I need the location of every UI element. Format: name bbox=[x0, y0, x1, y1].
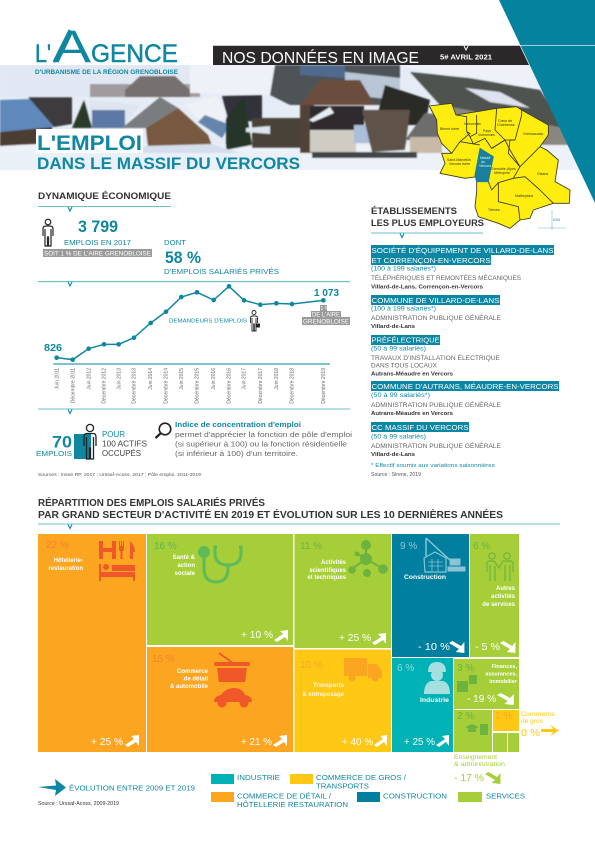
treemap: finances bbox=[454, 659, 519, 709]
treemap: finances: immobilier bbox=[489, 679, 518, 685]
divider bbox=[38, 409, 350, 414]
treemap: industrie: 6 % bbox=[397, 663, 414, 674]
heading: établissements: LES PLUS EMPLOYEURS bbox=[371, 218, 484, 229]
map labels: Oisans bbox=[537, 172, 548, 176]
legend: sectors: TRANSPORTS bbox=[316, 782, 369, 790]
heading: répartition des emplois: RÉPARTITION DES EMPLOIS SALARIÉS PRIVÉS bbox=[38, 496, 265, 509]
treemap: santé: action bbox=[177, 563, 195, 569]
treemap: santé: + 10 % bbox=[241, 629, 273, 641]
legend: evolution arrow: ÉVOLUTION ENTRE 2009 ET 2019 bbox=[69, 784, 195, 793]
legend: sectors bbox=[211, 773, 525, 809]
map labels: Trièves bbox=[488, 208, 500, 212]
employer 5: (50 à 99 salariés) bbox=[371, 434, 426, 440]
icon: people bbox=[487, 553, 513, 581]
employer 5: ADMINISTRATION PUBLIQUE GÉNÉRALE bbox=[371, 443, 501, 450]
arrow: up bbox=[274, 630, 288, 642]
map north scale: IGN bbox=[553, 217, 560, 222]
title: DANS LE MASSIF DU VERCORS bbox=[37, 154, 300, 173]
employer 4: (50 à 99 salariés*) bbox=[371, 393, 430, 399]
note: indice de concentration: (si supérieur à 100) ou la fonction résidentielle bbox=[175, 442, 347, 448]
callout: enseignement: - 17 % bbox=[454, 772, 484, 784]
line chart: demandeurs d'emploi bbox=[44, 284, 350, 404]
employer 4: COMMUNE D'AUTRANS, MÉAUDRE-EN-VERCORS bbox=[372, 382, 559, 391]
treemap: hôtellerie-restauration: Hôtellerie- bbox=[54, 558, 83, 564]
treemap: commerce de détail: & automobile bbox=[170, 684, 209, 690]
stat: 58 % bbox=[164, 238, 279, 276]
treemap: construction: - 10 % bbox=[418, 641, 450, 653]
map labels: Grenoble-Alpes bbox=[491, 167, 516, 171]
note: indice de concentration: (si inférieur à 100) d'un territoire. bbox=[175, 451, 298, 458]
employer 3: (50 à 99 salariés) bbox=[371, 346, 426, 352]
icon: stethoscope bbox=[200, 547, 241, 582]
arrow: up bbox=[436, 735, 449, 747]
line chart: demandeurs d'emploi: Juin 2013 bbox=[116, 368, 122, 390]
map north scale bbox=[538, 210, 566, 230]
line chart: demandeurs d'emploi: Décembre 2019 bbox=[321, 368, 327, 404]
treemap: santé bbox=[147, 534, 293, 645]
treemap: activités scientifiques bbox=[294, 534, 391, 648]
title bbox=[36, 129, 300, 173]
treemap: enseignement: 2 % bbox=[457, 711, 474, 722]
employer 3: Autrans-Méaudre en Vercors bbox=[371, 372, 453, 378]
treemap: construction: 9 % bbox=[400, 541, 417, 552]
line chart: demandeurs d'emploi: Juin 2012 bbox=[86, 368, 92, 390]
treemap: autres services: 6 % bbox=[473, 541, 490, 552]
icon: magnifier bbox=[156, 423, 171, 438]
line chart: demandeurs d'emploi: Juin 2016 bbox=[211, 368, 217, 390]
treemap: autres services: - 5 % bbox=[475, 641, 500, 653]
treemap: commerce de détail: 15 % bbox=[152, 654, 175, 665]
icon: crane bbox=[424, 538, 465, 572]
map labels: Chartreuse bbox=[497, 123, 515, 127]
header band: nos données en image: 5# AVRIL 2021 bbox=[440, 52, 492, 62]
employer 3: DANS TOUS LOCAUX bbox=[371, 364, 437, 370]
footnote and source: Source : Sirene, 2019 bbox=[371, 472, 421, 478]
stat: 58 %: DONT bbox=[164, 238, 186, 247]
treemap: activités scientifiques: + 25 % bbox=[339, 632, 371, 644]
treemap: commerce de détail: de détail bbox=[184, 676, 208, 682]
callout: commerce de gros: Commerce bbox=[521, 712, 556, 718]
line chart: demandeurs d'emploi: Décembre 2016 bbox=[226, 368, 232, 404]
icon: person bbox=[43, 219, 53, 246]
callout: commerce de gros: de gros bbox=[521, 719, 543, 725]
teal corner triangle bbox=[499, 0, 595, 203]
employer 1 bbox=[371, 245, 554, 290]
legend: sectors: INDUSTRIE bbox=[237, 773, 280, 782]
arrow: down bbox=[497, 693, 514, 705]
treemap: autres services bbox=[470, 534, 519, 657]
callout: commerce de gros bbox=[521, 712, 559, 739]
treemap: construction: Construction bbox=[404, 575, 446, 581]
map labels: Métropole bbox=[494, 171, 510, 175]
map labels: Pays bbox=[483, 129, 491, 133]
stat: 3 799 emplois: SOIT 1 % DE L'AIRE GRENOBLOISE bbox=[44, 250, 152, 258]
stat: 70 emplois pour 100 actifs occupés: 70 bbox=[52, 432, 72, 452]
line chart: demandeurs d'emploi: 826 bbox=[44, 342, 62, 354]
note: indice de concentration bbox=[175, 422, 353, 458]
icon: job seeker with briefcase bbox=[250, 310, 260, 331]
arrow: down bbox=[485, 772, 500, 784]
map of territories bbox=[429, 103, 570, 228]
map labels: Bièvre Isère bbox=[440, 127, 459, 131]
treemap: enseignement bbox=[454, 710, 492, 752]
callout: enseignement: Enseignement bbox=[454, 755, 497, 761]
callout: commerce de gros: 0 % bbox=[521, 727, 540, 739]
treemap: autres services: Autres bbox=[496, 586, 516, 592]
title: L'EMPLOI bbox=[37, 132, 142, 155]
map labels: Matheysine bbox=[515, 194, 533, 198]
treemap: activités scientifiques: et techniques bbox=[307, 575, 347, 581]
treemap: commerce de détail: Commerce bbox=[177, 669, 209, 675]
employer 3: TRAVAUX D'INSTALLATION ÉLECTRIQUE bbox=[371, 355, 500, 362]
treemap: finances: assurances, bbox=[485, 672, 517, 678]
stat: 70 emplois pour 100 actifs occupés: EMPLOIS bbox=[36, 449, 72, 458]
treemap: autres services: de services bbox=[482, 602, 516, 608]
note: indice de concentration: Indice de concentration d'emploi bbox=[175, 422, 301, 429]
arrow: flat bbox=[541, 725, 559, 736]
callout: enseignement: & administration bbox=[454, 762, 505, 768]
header band: nos données en image: NOS DONNÉES EN IMAGE bbox=[222, 50, 419, 67]
white line across triangle bbox=[519, 44, 595, 46]
legend: sectors: HÔTELLERIE RESTAURATION bbox=[237, 800, 348, 809]
employer 2: (100 à 199 salariés*) bbox=[371, 306, 436, 312]
heading: dynamique économique bbox=[38, 191, 171, 211]
callout: enseignement bbox=[454, 755, 505, 784]
stat: 70 emplois pour 100 actifs occupés: 100 ACTIFS bbox=[102, 440, 147, 448]
treemap: santé: Santé & bbox=[173, 555, 196, 561]
map labels: du bbox=[481, 160, 485, 164]
treemap: activités scientifiques: Activités bbox=[321, 560, 347, 566]
line chart: demandeurs d'emploi: DEMANDEURS D'EMPLOIS bbox=[169, 319, 247, 325]
stat: 70 emplois pour 100 actifs occupés: OCCUPÉS bbox=[102, 449, 141, 458]
treemap: transports: Transports bbox=[313, 683, 345, 689]
treemap: activités scientifiques: scientifiques bbox=[309, 568, 347, 574]
map labels: Massif bbox=[480, 156, 490, 160]
employer 4: Autrans-Méaudre en Vercors bbox=[371, 411, 453, 417]
line chart: demandeurs d'emploi: Juin 2011 bbox=[54, 368, 60, 389]
treemap: autres services: activités bbox=[491, 594, 516, 600]
line chart: demandeurs d'emploi: Décembre 2018 bbox=[290, 368, 296, 404]
heading: répartition des emplois bbox=[38, 496, 560, 528]
treemap: transports: 10 % bbox=[300, 660, 323, 671]
treemap: commerce de gros bbox=[493, 710, 519, 731]
footnote and source: * Effectif soumis aux variations saisonnières bbox=[371, 463, 496, 469]
arrow: down bbox=[449, 641, 464, 653]
treemap: santé: sociale bbox=[175, 571, 196, 577]
arrow: up bbox=[374, 735, 387, 747]
map labels: Grésivaudan bbox=[523, 132, 543, 136]
treemap: transports: & entreposage bbox=[302, 692, 345, 698]
line chart: demandeurs d'emploi: Décembre 2011 bbox=[70, 368, 76, 403]
stat: 3 799 emplois: EMPLOIS EN 2017 bbox=[64, 238, 131, 247]
legend: sectors: CONSTRUCTION bbox=[383, 792, 447, 800]
banner photo: snowy village bbox=[0, 65, 585, 170]
line chart: demandeurs d'emploi: Juin 2017 bbox=[242, 368, 248, 390]
legend: sectors: SERVICES bbox=[486, 792, 525, 800]
arrow: up bbox=[125, 735, 139, 747]
arrow: up bbox=[273, 735, 287, 747]
line chart: demandeurs d'emploi: Décembre 2012 bbox=[102, 368, 108, 404]
employer 3 bbox=[371, 335, 500, 378]
employer 1: (100 à 199 salariés*) bbox=[371, 266, 436, 272]
treemap: transports: + 40 % bbox=[342, 736, 373, 748]
source: Sources : Insee RP, 2017 ; Urssaf-Acoss, 2017 ; Pôle emploi, 2011-2019 bbox=[38, 472, 201, 477]
icon: graduation cap and building bbox=[465, 724, 488, 735]
line chart: demandeurs d'emploi: Décembre 2015 bbox=[194, 368, 200, 404]
heading: établissements bbox=[371, 206, 484, 238]
icon: worker bbox=[424, 662, 450, 694]
treemap: industrie: Industrie bbox=[420, 698, 450, 704]
line chart: demandeurs d'emploi: Décembre 2017 bbox=[258, 368, 264, 404]
footnote and source bbox=[371, 463, 496, 478]
employer 1: ET CORRENÇON-EN-VERCORS bbox=[372, 258, 491, 265]
arrow: up bbox=[372, 633, 386, 645]
treemap: hôtellerie-restauration: 22 % bbox=[46, 540, 69, 551]
logo: l'agence: L' bbox=[35, 40, 51, 68]
stat: 58 %: D'EMPLOIS SALARIÉS PRIVÉS bbox=[164, 267, 279, 276]
line chart: demandeurs d'emploi: Juin 2018 bbox=[274, 368, 280, 390]
line chart: demandeurs d'emploi: Juin 2014 bbox=[148, 368, 154, 390]
line chart: demandeurs d'emploi: Juin 2015 bbox=[179, 368, 185, 390]
note: indice de concentration: permet d'apprécier la fonction de pôle d'emploi bbox=[175, 432, 353, 439]
logo: l'agence: A bbox=[53, 21, 91, 72]
icon: finance squares bbox=[457, 675, 477, 692]
stat: 70 emplois pour 100 actifs occupés: POUR bbox=[102, 430, 125, 439]
employer 3: PRÉFÉLECTRIQUE bbox=[372, 336, 440, 344]
logo: l'agence: GENCE bbox=[91, 40, 178, 68]
divider bbox=[38, 282, 350, 286]
icon: fork, knife and bed bbox=[99, 541, 135, 581]
map labels: Voironnais bbox=[464, 122, 481, 126]
source: Source : Urssaf-Acoss, 2009-2019 bbox=[38, 801, 119, 807]
stat: 3 799 emplois bbox=[43, 217, 152, 258]
line chart: demandeurs d'emploi: 1 % bbox=[320, 306, 330, 312]
stat: 70 emplois pour 100 actifs occupés bbox=[36, 424, 147, 459]
map labels: Saint-Marcellin bbox=[447, 158, 471, 162]
map labels: Vercors bbox=[479, 164, 491, 168]
employer 2: COMMUNE DE VILLARD-DE-LANS bbox=[372, 298, 500, 305]
stat: 3 799 emplois: 3 799 bbox=[78, 217, 118, 236]
legend: evolution arrow bbox=[38, 779, 195, 796]
treemap: activités scientifiques: 11 % bbox=[300, 541, 322, 552]
line chart: demandeurs d'emploi: 1 073 bbox=[314, 287, 339, 299]
line chart: demandeurs d'emploi: Décembre 2013 bbox=[132, 368, 138, 404]
map labels: Cœur de bbox=[498, 119, 512, 123]
line chart: demandeurs d'emploi: Décembre 2014 bbox=[164, 368, 170, 404]
legend: sectors: COMMERCE DE GROS / bbox=[316, 773, 407, 782]
treemap: industrie bbox=[392, 658, 453, 752]
heading: répartition des emplois: PAR GRAND SECTEUR D'ACTIVITÉ EN 2019 ET ÉVOLUTION SUR LES 10 DERNIÈRES ANNÉES bbox=[38, 508, 503, 521]
treemap: commerce de détail bbox=[147, 647, 293, 752]
treemap: hôtellerie-restauration: + 25 % bbox=[91, 736, 123, 748]
employer 4 bbox=[371, 381, 559, 417]
map labels bbox=[440, 119, 548, 212]
employer 5: CC MASSIF DU VERCORS bbox=[372, 425, 469, 432]
heading: dynamique économique: DYNAMIQUE ÉCONOMIQUE bbox=[38, 191, 171, 202]
icon: molecule bbox=[349, 541, 387, 576]
employer 1: SOCIÉTÉ D'ÉQUIPEMENT DE VILLARD-DE-LANS bbox=[372, 246, 554, 255]
arrow: down bbox=[500, 641, 515, 653]
treemap: finances: Finances, bbox=[492, 664, 517, 670]
employer 1: Villard-de-Lans, Corrençon-en-Vercors bbox=[371, 284, 483, 290]
treemap: commerce de gros: 1 % bbox=[495, 711, 512, 722]
map labels: Vercors Isère bbox=[449, 162, 470, 166]
treemap: hôtellerie-restauration bbox=[38, 534, 146, 752]
employer 2: ADMINISTRATION PUBLIQUE GÉNÉRALE bbox=[371, 315, 501, 322]
legend: sectors: COMMERCE DE DÉTAIL / bbox=[237, 792, 332, 800]
line chart: demandeurs d'emploi: DE L'AIRE bbox=[312, 312, 340, 318]
heading: établissements: ÉTABLISSEMENTS bbox=[371, 206, 457, 217]
icon: truck bbox=[344, 658, 382, 682]
treemap: commerce de détail: + 21 % bbox=[241, 736, 272, 748]
employer 1: TÉLÉPHÉRIQUES ET REMONTÉES MÉCANIQUES bbox=[371, 275, 521, 282]
treemap: finances: - 19 % bbox=[467, 694, 496, 705]
map labels: Voironnais bbox=[478, 133, 495, 137]
employer 2 bbox=[371, 295, 501, 330]
line chart: demandeurs d'emploi: GRENOBLOISE bbox=[303, 320, 349, 326]
employer 2: Villard-de-Lans bbox=[371, 324, 415, 330]
header band: nos données en image bbox=[213, 46, 529, 67]
employer 5: Villard-de-Lans bbox=[371, 452, 415, 458]
logo: l'agence bbox=[35, 21, 179, 76]
logo: l'agence: D'URBANISME DE LA RÉGION GRENOBLOISE bbox=[35, 67, 179, 76]
treemap: santé: 16 % bbox=[154, 541, 177, 552]
treemap: finances: 3 % bbox=[457, 663, 474, 674]
treemap: transports bbox=[294, 650, 391, 752]
treemap: small services cells bbox=[493, 733, 519, 752]
treemap: hôtellerie-restauration: restauration bbox=[48, 566, 83, 572]
treemap: construction bbox=[392, 534, 469, 657]
icon: basket and car bbox=[214, 653, 252, 708]
treemap: industrie: + 25 % bbox=[404, 736, 435, 748]
employer 5 bbox=[371, 422, 501, 458]
stat: 58 %: 58 % bbox=[165, 248, 201, 267]
employer 4: ADMINISTRATION PUBLIQUE GÉNÉRALE bbox=[371, 402, 501, 409]
